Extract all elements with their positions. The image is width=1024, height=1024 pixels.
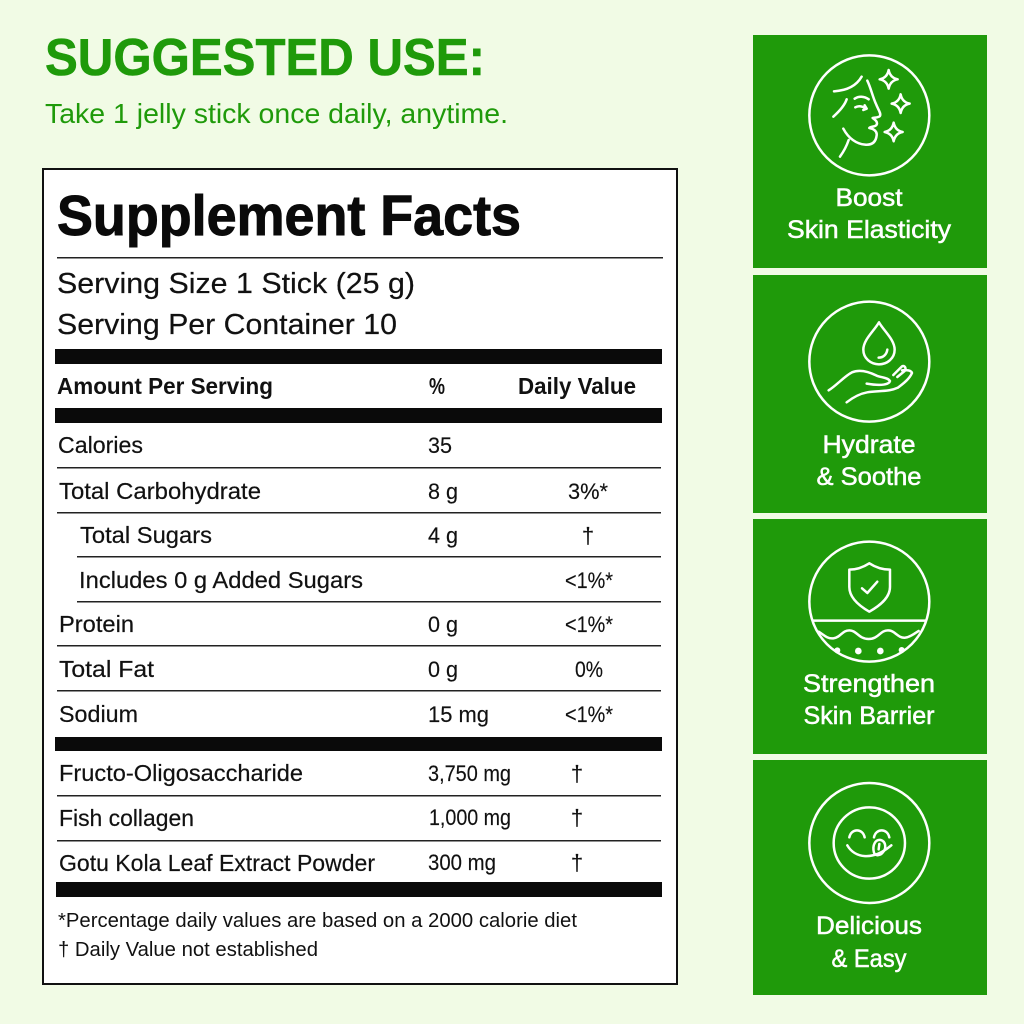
ingredient rows: 1,000 mg [429,805,511,830]
label: Hydrate [822,431,916,459]
nutrient rows [57,432,661,727]
label [816,912,922,973]
column headers [57,373,636,399]
label: Delicious [816,912,922,940]
ingredient rows: † [571,850,583,875]
footnotes: † Daily Value not established [58,939,318,961]
label: Boost [836,184,903,212]
ingredient rows: † [571,761,583,786]
nutrient rows: 0% [575,657,603,682]
ingredient rows [57,760,661,876]
icon: smiling face with tongue [809,783,929,903]
nutrient rows: Includes 0 g Added Sugars [79,567,363,593]
nutrient rows: 15 mg [428,702,489,727]
icon: face with sparkles [809,55,929,175]
panel: strengthen skin barrier [753,519,987,754]
nutrient rows: Calories [58,432,143,458]
label: Strengthen [803,670,935,698]
serving information: Serving Per Container 10 [57,309,397,341]
nutrient rows: 35 [428,433,452,458]
ingredient rows: Fish collagen [59,805,194,831]
column headers: % [429,373,445,399]
label [816,431,922,491]
nutrient rows: † [582,523,594,548]
column headers: Amount Per Serving [57,373,273,399]
ingredient rows: † [571,805,583,830]
heading: suggested use: SUGGESTED USE: [45,29,485,87]
ingredient rows: 3,750 mg [428,761,511,786]
panel: delicious and easy [753,760,987,995]
panel: boost skin elasticity [753,35,987,268]
nutrient rows: 8 g [428,479,458,504]
footnotes [58,910,577,961]
label: Skin Barrier [804,702,934,730]
nutrient rows: 3%* [568,479,608,504]
label: Skin Elasticity [787,216,952,244]
nutrient rows: Total Sugars [80,522,212,548]
nutrient rows: <1%* [565,612,613,637]
nutrient rows: 0 g [428,612,458,637]
table title: Supplement Facts [57,184,521,248]
column headers: Daily Value [518,373,636,399]
nutrient rows: <1%* [565,702,613,727]
serving information: Serving Size 1 Stick (25 g) [57,268,415,300]
label [787,184,952,244]
panel: supplement facts table [42,168,678,985]
ingredient rows: Fructo-Oligosaccharide [59,760,303,786]
ingredient rows: Gotu Kola Leaf Extract Powder [59,850,375,876]
serving information [57,268,415,341]
text: dosage instruction: Take 1 jelly stick once daily, anytime. [45,98,508,129]
label: & Soothe [816,463,922,491]
nutrient rows: 0 g [428,657,458,682]
label: & Easy [832,945,907,973]
nutrient rows: Sodium [59,701,138,727]
nutrient rows: Protein [59,611,134,637]
label [803,670,935,730]
ingredient rows: 300 mg [428,850,496,875]
nutrient rows: Total Carbohydrate [59,478,261,504]
icon: water drop over open hand [809,302,929,422]
icon: shield over skin layers [809,542,929,662]
nutrient rows: Total Fat [59,656,154,682]
nutrient rows: <1%* [565,568,613,593]
footnotes: *Percentage daily values are based on a 2000 calorie diet [58,910,577,932]
nutrient rows: 4 g [428,523,458,548]
panel: hydrate and soothe [753,275,987,513]
